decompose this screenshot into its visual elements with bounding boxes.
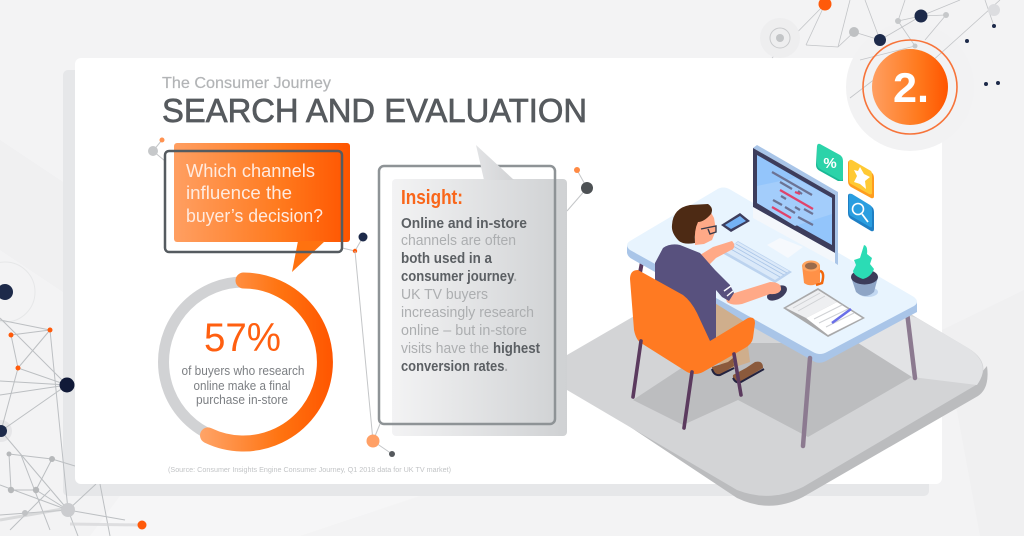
donut chart: 57%: 57% [204,316,281,360]
insight callout: channels are often [401,233,516,249]
notebook [783,288,865,337]
chair legs [633,341,741,428]
insight callout: conversion rates. [401,359,508,375]
insight callout: both used in a [401,251,493,267]
arm: left [700,241,734,267]
desk back legs [639,262,915,378]
insight callout: online – but in-store [401,323,527,339]
keyboard [722,241,792,283]
plant [851,245,878,297]
icon: magnifier [848,194,874,231]
question callout: Which channels [186,160,315,181]
connector dots: question [148,138,368,253]
step badge [863,40,957,134]
donut chart: 57%: purchase in-store [196,393,288,407]
insight callout: increasingly research [401,305,534,321]
hair [672,204,712,244]
desk [627,188,917,363]
phone [721,213,750,232]
icon: star [848,160,874,198]
person and chair [630,204,781,428]
step badge: 2. [893,64,929,111]
title [162,75,587,129]
trousers [708,300,750,368]
isometric platform [567,234,988,506]
desk front leg [803,358,810,446]
icon: percent: % [823,155,837,172]
white card [75,58,942,484]
arm: right [725,282,781,305]
network: top right [760,0,1000,98]
head [695,207,716,245]
title: SEARCH AND EVALUATION [162,92,587,129]
donut chart: 57%: online make a final [194,379,290,393]
question callout: influence the [186,182,292,203]
connector dots: insight [355,167,593,457]
coffee cup [802,260,823,285]
source note: (Source: Consumer Insights Engine Consumer Journey, Q1 2018 data for UK TV market) [168,467,451,474]
question callout [165,143,350,272]
question callout: buyer’s decision? [186,205,323,226]
insight callout: visits have the [401,341,489,357]
donut chart: 57% [164,280,325,443]
network: bottom left [0,262,146,536]
insight callout: highest [493,341,540,357]
insight callout [379,145,567,436]
insight callout: Online and in-store [401,216,527,232]
insight callout: UK TV buyers [401,287,488,303]
badge backing circle [846,23,974,151]
title: The Consumer Journey [162,75,331,92]
card shadow [63,70,929,496]
monitor [753,145,838,265]
shirt [655,244,734,343]
chair back [630,270,755,374]
insight callout: consumer journey. [401,269,517,285]
mouse [764,282,790,304]
shoes [712,358,764,382]
app icons [816,144,874,231]
insight callout: Insight: [401,187,463,209]
donut chart: 57%: of buyers who research [182,364,305,378]
glasses [701,226,716,234]
